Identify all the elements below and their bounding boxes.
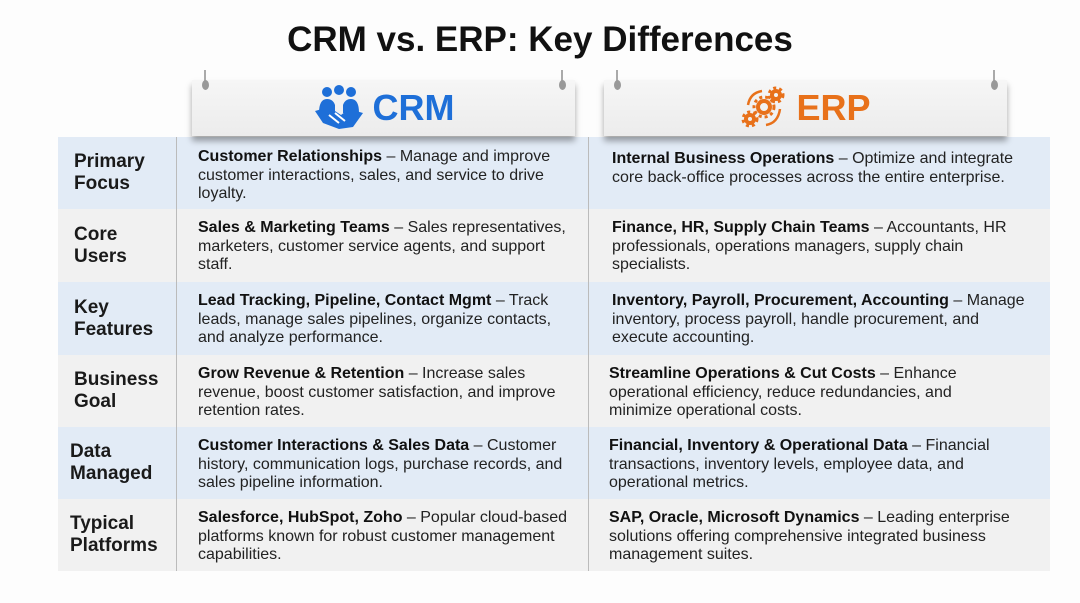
row: Core Users: Sales & Marketing Teams – Sales representatives, marketers, customer service agents, and support staff. [198,219,566,273]
row: Primary Focus: Internal Business Operations – Optimize and integrate core back-office processes across the entire enterprise. [612,150,1013,186]
row: Data Managed: Financial, Inventory & Operational Data – Financial transactions, inventory levels, employee data, and operational metrics. [609,437,990,491]
header card: CRM: CRM [372,87,454,128]
title: CRM vs. ERP: Key Differences [287,20,793,59]
row: Business Goal: Goal [74,391,116,412]
row: Core Users: Users [74,246,127,266]
icon: team handshake [315,85,363,129]
row: Key Features: Inventory, Payroll, Procurement, Accounting – Manage inventory, process payroll, handle procurement, and execute accounting. [612,292,1025,346]
row: Core Users: Core [74,224,117,244]
header card: ERP [604,80,1007,136]
row: Key Features [58,282,1050,355]
row: Business Goal: Streamline Operations & Cut Costs – Enhance operational efficiency, reduce redundancies, and minimize operational costs. [609,365,957,419]
row: Data Managed: Data [70,441,111,462]
row: Business Goal: Grow Revenue & Retention – Increase sales revenue, boost customer satisfaction, and improve retention rates. [198,365,556,419]
row: Primary Focus: Focus [74,173,130,194]
row: Core Users [58,209,1050,282]
row: Typical Platforms [58,499,1050,571]
row: Key Features: Lead Tracking, Pipeline, Contact Mgmt – Track leads, manage sales pipelines, organize contacts, and analyze performance. [198,292,551,346]
row: Data Managed: Managed [70,463,152,484]
row: Primary Focus: Primary [74,151,145,172]
row: Core Users: Finance, HR, Supply Chain Teams – Accountants, HR professionals, operations managers, supply chain specialists. [612,219,1006,273]
row: Data Managed [58,427,1050,499]
row: Typical Platforms: Salesforce, HubSpot, Zoho – Popular cloud-based platforms known for robust customer management capabilities. [198,509,567,563]
header card: ERP: ERP [796,87,871,128]
row: Typical Platforms: Platforms [70,535,158,556]
header card: CRM [192,80,575,136]
row: Business Goal [58,355,1050,427]
row: Primary Focus: Customer Relationships – Manage and improve customer interactions, sales, and service to drive loyalty. [198,148,550,202]
row: Data Managed: Customer Interactions & Sales Data – Customer history, communication logs, purchase records, and sales pipeline information. [198,437,562,491]
row: Key Features: Key [74,296,109,318]
row: Key Features: Features [74,318,153,340]
row: Typical Platforms: SAP, Oracle, Microsoft Dynamics – Leading enterprise solutions offering comprehensive integrated business management suites. [609,509,1010,563]
row: Primary Focus [58,137,1050,209]
icon: gears [742,86,784,128]
row: Typical Platforms: Typical [70,513,134,534]
row: Business Goal: Business [74,369,158,390]
